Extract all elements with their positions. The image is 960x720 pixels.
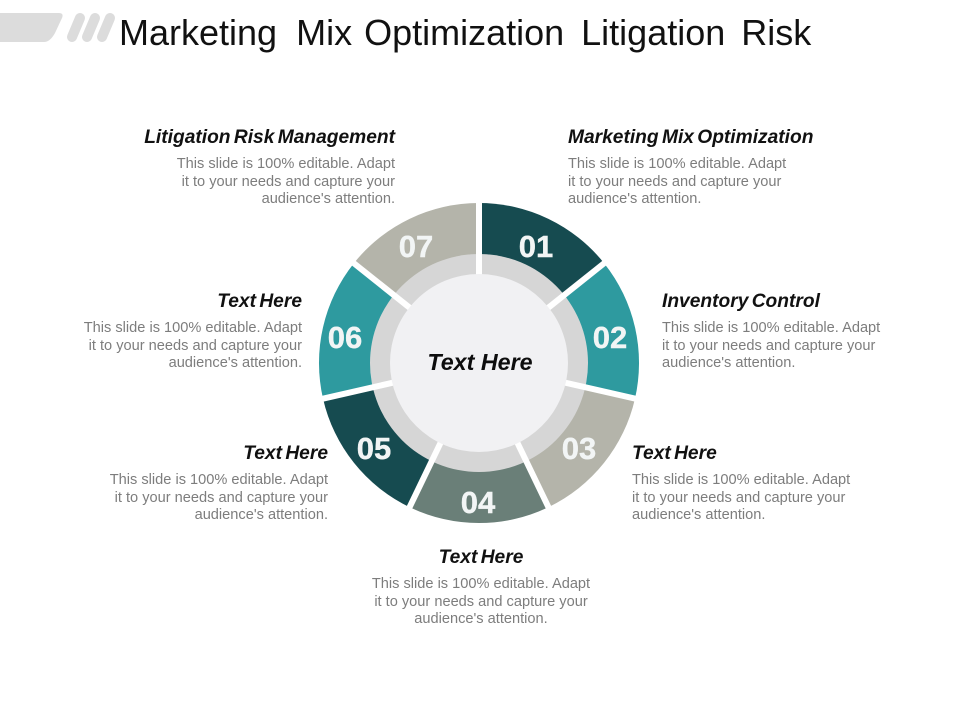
segment 06: [319, 263, 479, 399]
text: This slide is 100% editable. Adapt: [568, 156, 786, 172]
text: audience's attention.: [169, 355, 302, 371]
title: Marketing Mix Optimization Litigation Risk: [119, 12, 811, 53]
centre label: Text Here: [427, 349, 533, 375]
segment numbers: 07: [399, 229, 433, 264]
text: audience's attention.: [262, 191, 395, 207]
text block: 06 Text Here: [84, 291, 302, 371]
text: Text Here: [243, 443, 328, 464]
segment separators: [315, 195, 643, 514]
segment numbers: [328, 229, 627, 520]
text: This slide is 100% editable. Adapt: [177, 156, 395, 172]
text: audience's attention.: [632, 507, 765, 523]
text: audience's attention.: [414, 611, 548, 627]
grey inner ring: [370, 254, 588, 472]
text: it to your needs and capture your: [89, 338, 302, 354]
segment 03: [479, 363, 635, 507]
text: it to your needs and capture your: [115, 490, 328, 506]
text: This slide is 100% editable. Adapt: [110, 472, 328, 488]
text: it to your needs and capture your: [182, 174, 395, 190]
segment numbers: 05: [357, 431, 391, 466]
text: Text Here: [217, 291, 302, 312]
text: audience's attention.: [195, 507, 328, 523]
segment 04: [410, 363, 548, 523]
text block: Inventory Control: [662, 291, 880, 371]
centre circle: [390, 274, 568, 452]
segment 05: [323, 363, 479, 507]
segment numbers: 04: [461, 485, 496, 520]
text: This slide is 100% editable. Adapt: [662, 320, 880, 336]
text block: Litigation Risk Management: [144, 127, 396, 207]
text block: 03 Text Here: [632, 443, 850, 523]
text: This slide is 100% editable. Adapt: [632, 472, 850, 488]
text: audience's attention.: [662, 355, 795, 371]
decorative header tab icon: [0, 13, 115, 42]
text: it to your needs and capture your: [632, 490, 845, 506]
text: it to your needs and capture your: [374, 594, 588, 610]
text: Text Here: [439, 547, 523, 568]
segment numbers: 06: [328, 320, 362, 355]
text block: 05 Text Here: [110, 443, 328, 523]
segment 01: [479, 203, 604, 363]
text: Text Here: [632, 443, 717, 464]
segment 07: [354, 203, 479, 363]
segment numbers: 03: [562, 431, 596, 466]
text: This slide is 100% editable. Adapt: [372, 576, 590, 592]
text: Inventory Control: [662, 291, 820, 312]
text: it to your needs and capture your: [662, 338, 875, 354]
text: Marketing Mix Optimization: [568, 127, 813, 148]
text block: 04 Text Here: [372, 547, 590, 627]
segment 02: [479, 263, 639, 399]
segment numbers: 01: [519, 229, 553, 264]
text block: Marketing Mix Optimization: [568, 127, 813, 207]
segment numbers: 02: [593, 320, 627, 355]
text: it to your needs and capture your: [568, 174, 781, 190]
text: audience's attention.: [568, 191, 701, 207]
text: This slide is 100% editable. Adapt: [84, 320, 302, 336]
text: Litigation Risk Management: [144, 127, 395, 148]
